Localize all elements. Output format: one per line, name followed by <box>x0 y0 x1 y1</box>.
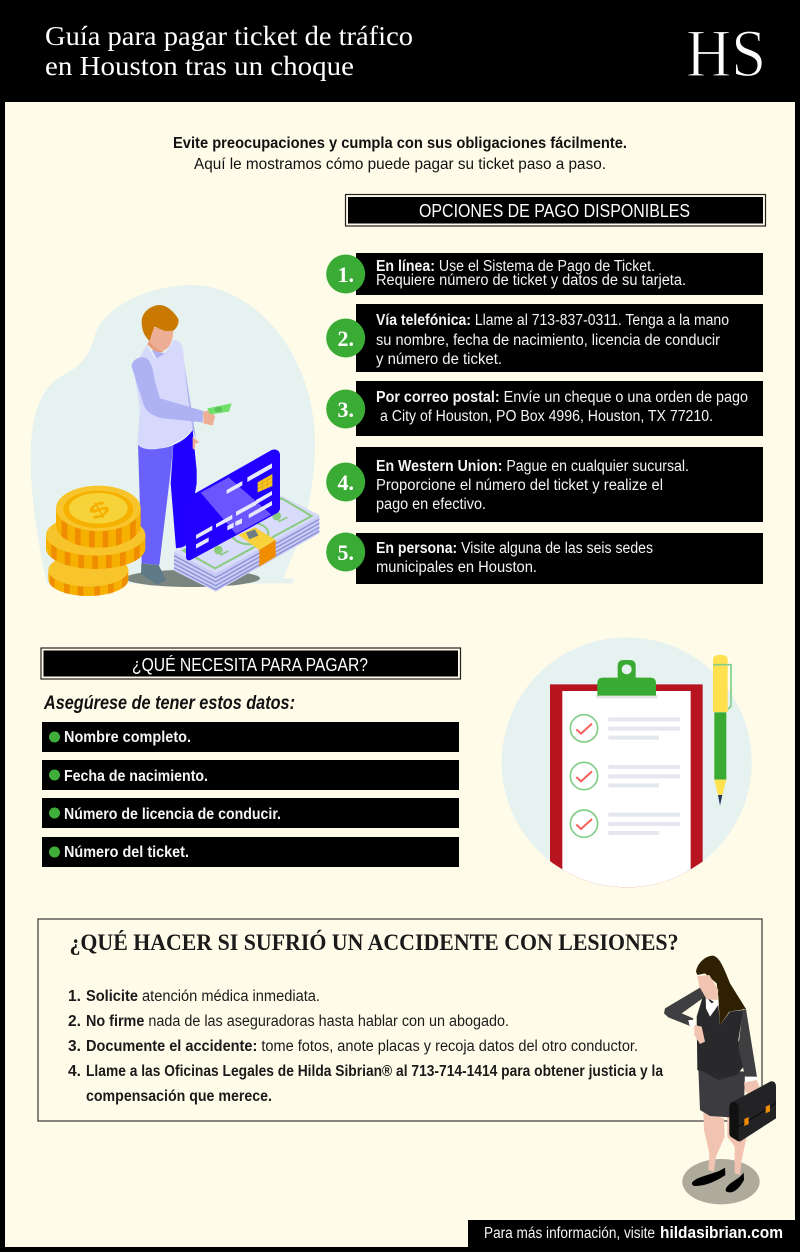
heading: qué necesita: ¿QUÉ NECESITA PARA PAGAR? <box>132 655 368 675</box>
numbered list: Llame a las Oficinas Legales de Hilda Sibrian® al 713-714-1414 para obtener justicia y la <box>86 1063 663 1080</box>
numbered list: 1. <box>68 988 81 1005</box>
icon: briefcase <box>729 1081 776 1142</box>
item: fecha <box>42 760 459 790</box>
option 5: municipales en Houston. <box>376 559 537 576</box>
item: ticket: Número del ticket. <box>64 844 189 861</box>
icon: gold coins: $ <box>85 496 114 526</box>
title <box>45 20 413 81</box>
numbered list: 3. <box>68 1038 81 1055</box>
numbered list <box>68 988 663 1105</box>
option 3 <box>326 381 763 436</box>
heading: qué necesita <box>41 648 460 679</box>
checklist items <box>42 722 459 867</box>
numbered list: 2. <box>68 1013 81 1030</box>
title: Guía para pagar ticket de tráfico <box>45 20 413 51</box>
heading: accidente: ¿QUÉ HACER SI SUFRIÓ UN ACCIDENTE CON LESIONES? <box>70 929 678 956</box>
option 5 <box>326 532 763 584</box>
option 2: Vía telefónica: Llame al 713-837-0311. Tenga a la mano <box>376 312 729 329</box>
icon: check rows <box>570 715 680 837</box>
footer bar <box>468 1220 800 1252</box>
numbered list: Documente el accidente: tome fotos, anote placas y recoja datos del otro conductor. <box>86 1038 638 1055</box>
icon: money stack and credit card <box>174 449 319 592</box>
illustration: man paying with coins, card and cash <box>31 285 319 613</box>
option 4: 4. <box>337 470 354 495</box>
numbered list: Solicite atención médica inmediata. <box>86 988 320 1005</box>
option 4 <box>326 447 763 522</box>
icon: clip <box>597 660 656 696</box>
numbered list: 4. <box>68 1063 81 1080</box>
intro text: Evite preocupaciones y cumpla con sus obligaciones fácilmente. <box>173 135 627 152</box>
option 2: 2. <box>337 326 354 351</box>
option 4: En Western Union: Pague en cualquier sucursal. <box>376 458 689 475</box>
item: licencia: Número de licencia de conducir. <box>64 806 281 823</box>
item: licencia <box>42 798 459 828</box>
title: en Houston tras un choque <box>45 50 354 81</box>
option 3: Por correo postal: Envíe un cheque o una orden de pago <box>376 389 748 406</box>
numbered list: compensación que merece. <box>86 1088 272 1105</box>
item: fecha: Fecha de nacimiento. <box>64 768 208 785</box>
option 4: Proporcione el número del ticket y realize el <box>376 477 663 494</box>
option 2: y número de ticket. <box>376 351 502 368</box>
icon: gold coins <box>46 486 146 596</box>
intro text: Aquí le mostramos cómo puede pagar su ticket paso a paso. <box>194 156 606 173</box>
option 5: En persona: Visite alguna de las seis sedes <box>376 540 653 557</box>
option 2 <box>326 304 763 372</box>
footer bar: Para más información, visite <box>484 1225 655 1242</box>
option 3: 3. <box>337 397 354 422</box>
item: nombre <box>42 722 459 752</box>
subheading: asegúrese: Asegúrese de tener estos datos: <box>43 693 295 714</box>
item: nombre: Nombre completo. <box>64 729 191 746</box>
logo: HS: HS <box>686 15 766 91</box>
option 1: En línea: Use el Sistema de Pago de Ticket. <box>376 258 655 275</box>
option 1 <box>326 253 763 295</box>
icon: pen <box>713 655 731 806</box>
option 3: a City of Houston, PO Box 4996, Houston, TX 77210. <box>380 408 713 425</box>
heading: opciones de pago <box>346 194 766 226</box>
intro text <box>173 135 627 173</box>
option 4: pago en efectivo. <box>376 496 486 513</box>
illustration: woman with briefcase <box>664 956 776 1204</box>
icon: man upper body <box>132 305 232 450</box>
numbered list: No firme nada de las aseguradoras hasta hablar con un abogado. <box>86 1013 509 1030</box>
option 2: su nombre, fecha de nacimiento, licencia de conducir <box>376 332 720 349</box>
option 5: 5. <box>337 540 354 565</box>
illustration: clipboard and pen <box>502 637 752 898</box>
option 1: Requiere número de ticket y datos de su tarjeta. <box>376 272 686 289</box>
panel: accidente con lesiones <box>38 919 762 1121</box>
option 1: 1. <box>337 262 354 287</box>
item: ticket <box>42 837 459 867</box>
panel: opciones de pago <box>326 253 763 584</box>
heading: opciones de pago: OPCIONES DE PAGO DISPONIBLES <box>419 201 690 221</box>
footer bar: hildasibrian.com <box>660 1223 783 1242</box>
